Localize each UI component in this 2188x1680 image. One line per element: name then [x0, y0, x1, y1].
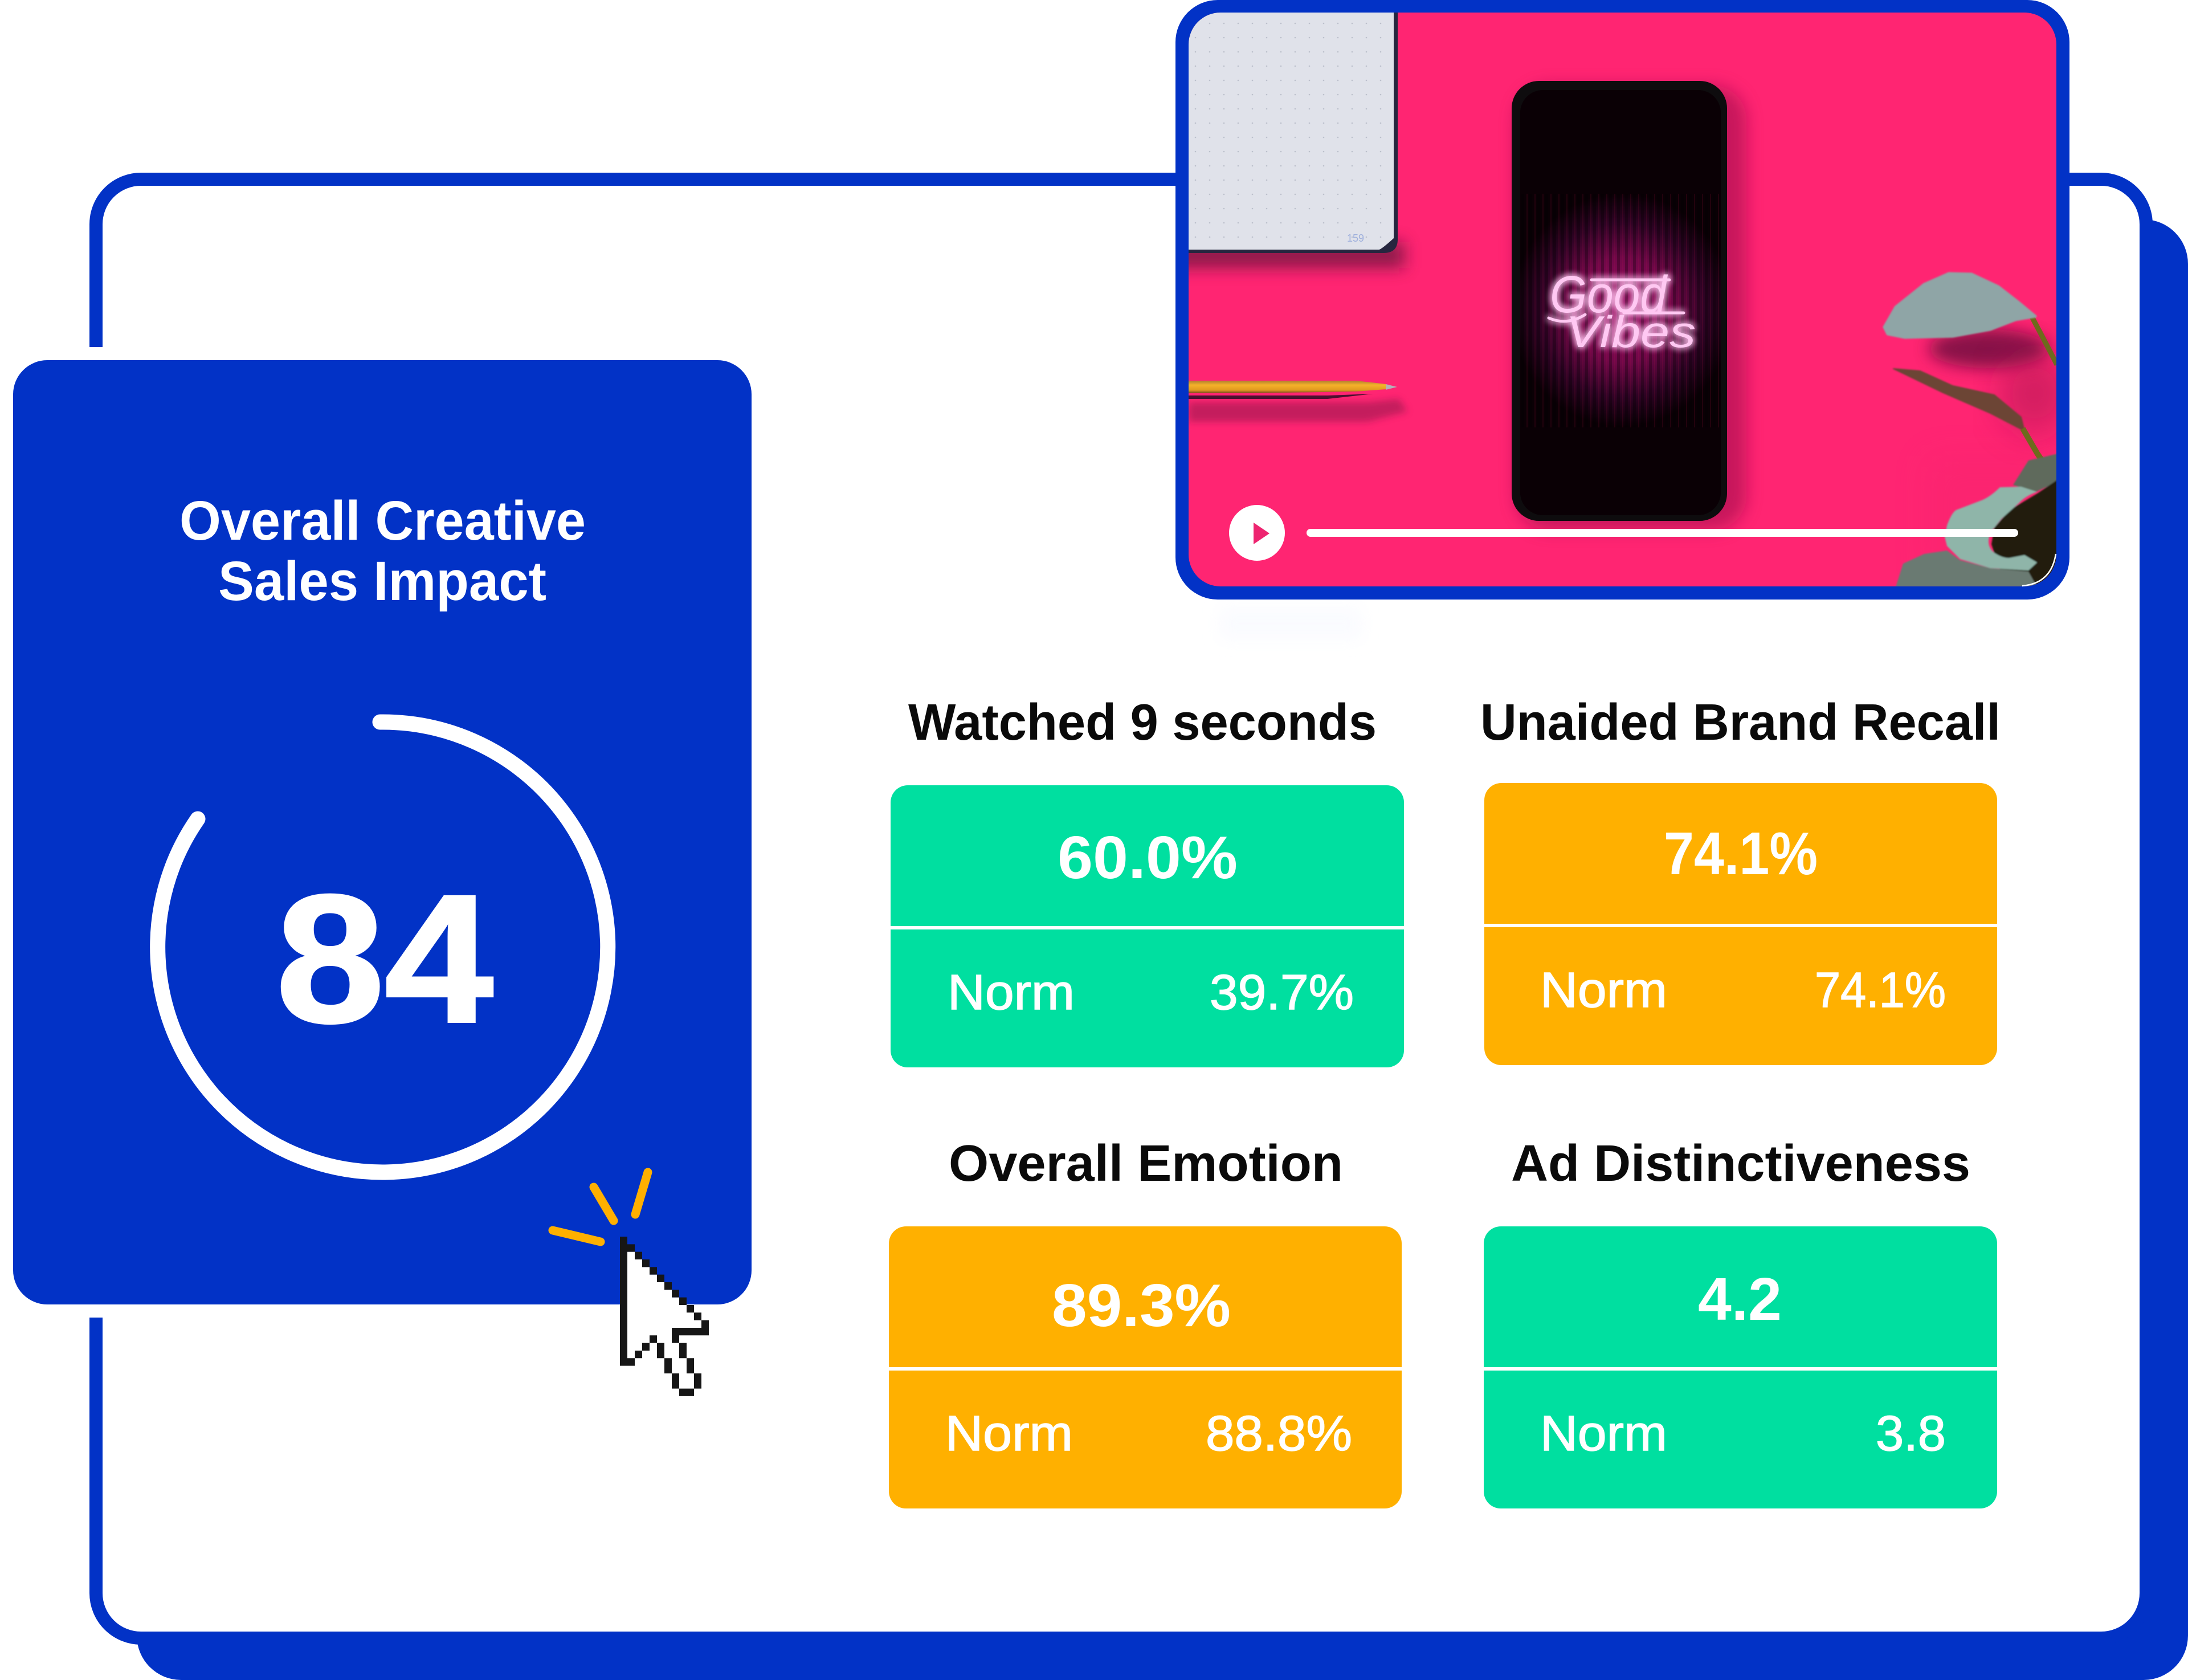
metric heading: Overall Emotion: [949, 1135, 1343, 1192]
score card background: [13, 360, 752, 1304]
metric heading: Watched 9 seconds: [908, 694, 1377, 751]
video player panel: [1162, 0, 2069, 600]
metric card: Norm: [945, 1406, 1073, 1461]
icon: phone: [1512, 81, 1727, 521]
video still photo: [1162, 6, 2068, 587]
metric card: [889, 1226, 1402, 1508]
icon: pen: [1189, 381, 1407, 422]
neon sign: Vibes: [1566, 307, 1696, 357]
metric card: 60.0%: [1058, 824, 1238, 891]
heading: overall creative sales impact: Overall Creative: [179, 490, 586, 552]
icon: plant: [1884, 274, 2068, 587]
icon: notebook: 159: [1347, 233, 1364, 244]
metric heading: Ad Distinctiveness: [1511, 1135, 1970, 1192]
score ring: [158, 722, 608, 1172]
metric: ad distinctiveness: [1484, 1135, 1997, 1508]
icon: notebook: [1179, 6, 1398, 253]
neon sign: Good: [1550, 266, 1668, 324]
score value: 84: [276, 857, 495, 1061]
metric card: Norm: [1540, 1406, 1667, 1461]
faint shadow below video: [1219, 607, 1362, 639]
neon sign: [1549, 266, 1696, 357]
metric heading: Unaided Brand Recall: [1480, 694, 2001, 751]
metric card: [1484, 1226, 1997, 1508]
metric card: Norm: [948, 965, 1075, 1020]
metric card: 74.1%: [1664, 820, 1818, 887]
metric card: 4.2: [1698, 1266, 1782, 1333]
icon: pixel cursor: [620, 1237, 709, 1396]
heading: overall creative sales impact: [179, 490, 586, 612]
metric card: 88.8%: [1206, 1406, 1352, 1461]
progress bar: [1307, 529, 2018, 537]
heading: overall creative sales impact: Sales Impact: [218, 550, 546, 612]
metric: unaided brand recall: [1480, 694, 2001, 1065]
metric card: [1484, 783, 1997, 1065]
metric: watched 9 seconds: [891, 694, 1404, 1067]
panel: overall creative sales impact: [13, 360, 752, 1304]
metric card: 74.1%: [1815, 963, 1946, 1018]
metric card: 89.3%: [1052, 1272, 1231, 1339]
video frame border: [1175, 0, 2069, 600]
icon: play button: [1229, 505, 1285, 561]
metric: overall emotion: [889, 1135, 1402, 1508]
icon: phone shadow: [1516, 85, 1746, 530]
corner highlight: [2022, 554, 2056, 586]
metric card: 3.8: [1876, 1406, 1946, 1461]
icon: click sparks: [553, 1172, 648, 1242]
metric card: Norm: [1540, 963, 1667, 1018]
metric card: 39.7%: [1210, 965, 1354, 1020]
metric card: [891, 785, 1404, 1067]
